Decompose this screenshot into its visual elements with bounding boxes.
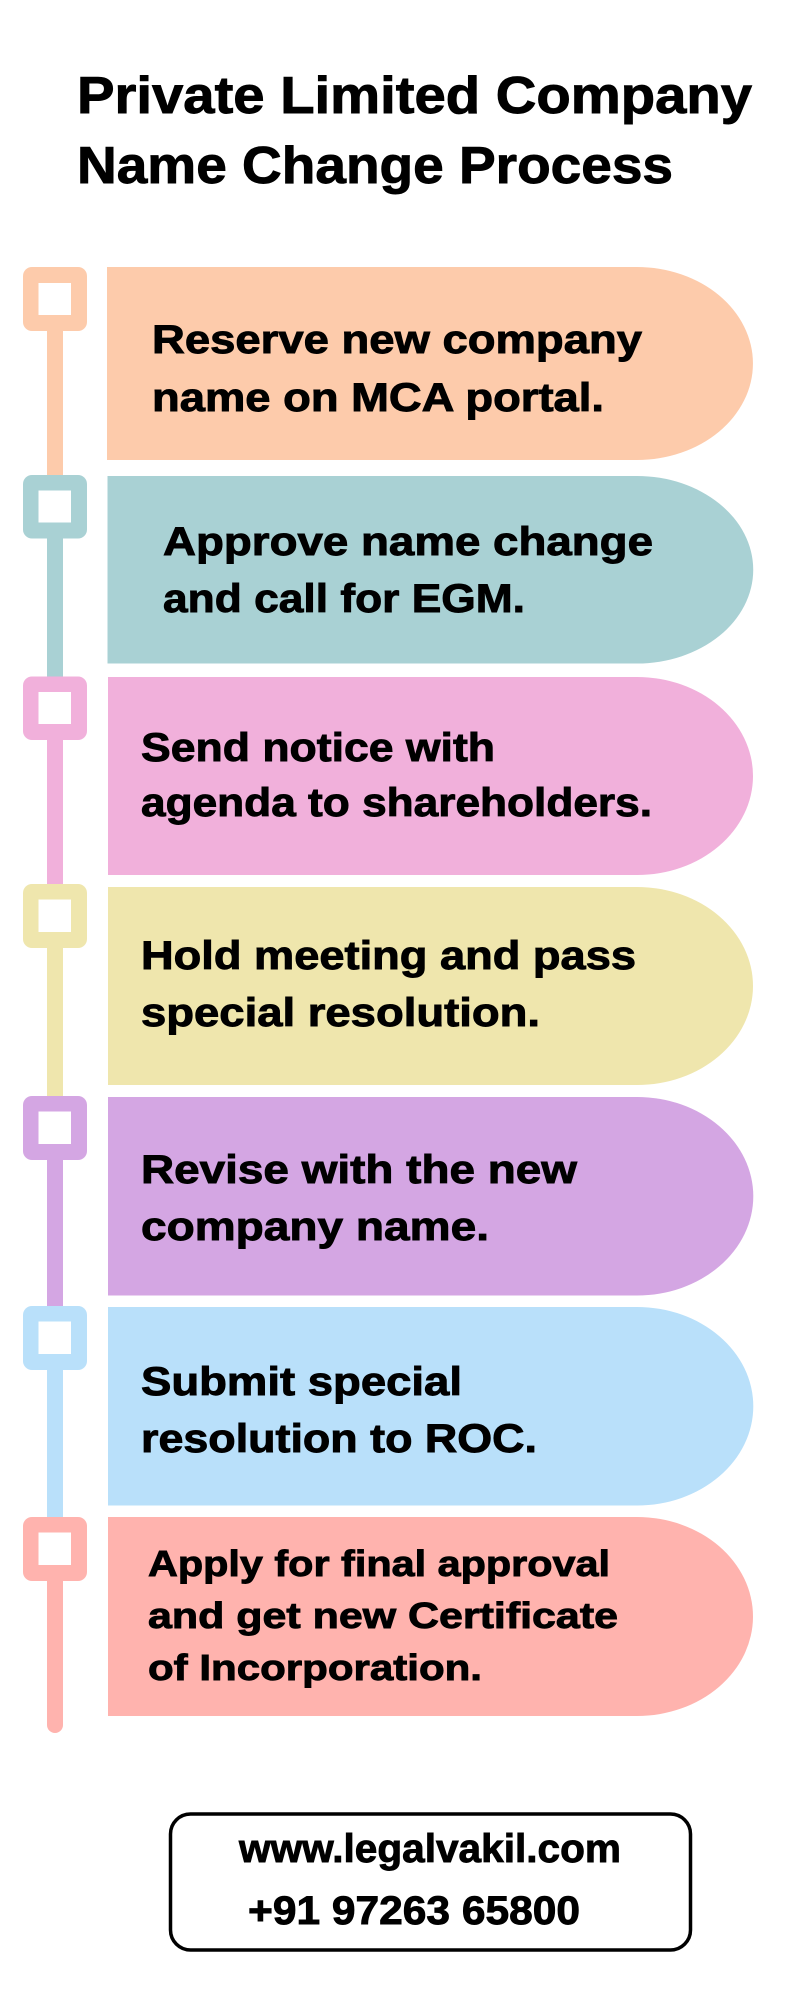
panel: step 6 submit: [108, 1307, 753, 1506]
panel: step 2 approve name change: [108, 476, 753, 664]
callout: contact details: +91 97263 65800: [248, 1889, 580, 1933]
panel: step 4 hold meeting: [108, 887, 753, 1085]
panel: step 6 submit: Submit special: [141, 1360, 462, 1404]
timeline connector: step 4: [23, 884, 87, 1106]
timeline connector: step 6: [23, 1306, 87, 1526]
panel: step 3 send notice: agenda to shareholders.: [141, 781, 652, 825]
timeline connector: step 3: [23, 676, 87, 894]
title: [77, 67, 752, 195]
panel: step 3 send notice: Send notice with: [141, 726, 495, 770]
title: Name Change Process: [77, 137, 673, 195]
panel: step 1 reserve name: Reserve new company: [152, 318, 643, 362]
callout: contact details: [170, 1814, 690, 1950]
panel: step 1 reserve name: [107, 267, 753, 460]
panel: step 4 hold meeting: special resolution.: [141, 991, 540, 1035]
panel: step 5 revise: Revise with the new: [141, 1148, 578, 1192]
timeline connector: step 1: [23, 267, 87, 485]
panel: step 6 submit: resolution to ROC.: [141, 1417, 537, 1461]
panel: step 2 approve name change: Approve name change: [163, 520, 653, 564]
title: Private Limited Company: [77, 67, 752, 125]
panel: step 7 apply for final approval: and get new Certificate: [148, 1595, 618, 1636]
panel: step 4 hold meeting: Hold meeting and pass: [141, 934, 636, 978]
timeline connector: step 7: [23, 1517, 87, 1733]
panel: step 7 apply for final approval: Apply for final approval: [148, 1543, 610, 1584]
panel: step 2 approve name change: and call for EGM.: [163, 577, 525, 621]
callout: contact details: www.legalvakil.com: [238, 1827, 621, 1871]
panel: step 3 send notice: [108, 677, 753, 875]
timeline connector: step 5: [23, 1096, 87, 1316]
panel: step 5 revise: company name.: [141, 1205, 489, 1249]
panel: step 1 reserve name: name on MCA portal.: [152, 376, 604, 420]
panel: step 7 apply for final approval: [108, 1517, 753, 1716]
panel: step 5 revise: [108, 1097, 753, 1296]
panel: step 7 apply for final approval: of Incorporation.: [148, 1647, 482, 1688]
timeline connector: step 2: [23, 475, 87, 685]
